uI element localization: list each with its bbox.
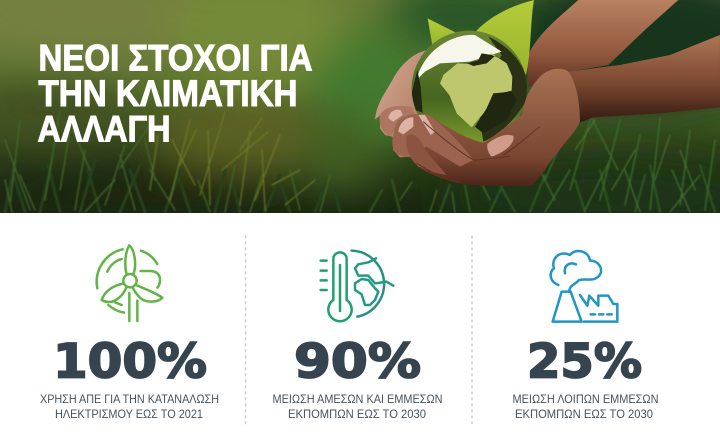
upper forearm xyxy=(527,0,678,87)
hero photo: hands holding a glass globe over grass xyxy=(0,0,720,230)
grass blades xyxy=(5,110,715,212)
thumb nail xyxy=(487,135,514,157)
panel: other indirect emissions xyxy=(512,251,658,421)
title: ΝΕΟΙ ΣΤΟΧΟΙ ΓΙΑ xyxy=(38,36,312,78)
finger nails and knuckles xyxy=(388,110,435,135)
icon: thermometer and globe xyxy=(321,251,393,321)
caption: other indirect emissions: ΕΚΠΟΜΠΩΝ ΕΩΣ ΤΟ 2030 xyxy=(515,407,653,421)
icon: factory and smoke cloud xyxy=(551,251,617,322)
leaves xyxy=(428,18,456,44)
title: ΑΛΛΑΓΗ xyxy=(38,108,170,150)
cupped front hand and palm xyxy=(420,69,580,186)
title xyxy=(38,36,312,150)
icon: wind turbine xyxy=(97,245,162,321)
panel: renewable electricity xyxy=(40,245,219,421)
divider: left xyxy=(244,236,246,424)
caption: renewable electricity: ΧΡΗΣΗ ΑΠΕ ΓΙΑ ΤΗΝ ΚΑΤΑΝΑΛΩΣΗ xyxy=(40,392,219,406)
lower forearm xyxy=(560,35,720,125)
panel: direct and indirect emissions xyxy=(272,251,442,421)
caption: other indirect emissions xyxy=(512,392,658,421)
figure: 100%: 100% xyxy=(53,334,207,390)
hands and globe xyxy=(375,0,720,186)
caption: direct and indirect emissions: ΜΕΙΩΣΗ ΑΜΕΣΩΝ ΚΑΙ ΕΜΜΕΣΩΝ xyxy=(272,392,442,406)
figure: 25%: 25% xyxy=(527,334,642,390)
fingers xyxy=(380,106,415,136)
caption: direct and indirect emissions: ΕΚΠΟΜΠΩΝ ΕΩΣ ΤΟ 2030 xyxy=(288,407,426,421)
figure: 90%: 90% xyxy=(294,334,421,390)
divider: right xyxy=(471,236,473,424)
caption: direct and indirect emissions xyxy=(272,392,442,421)
caption: other indirect emissions: ΜΕΙΩΣΗ ΛΟΙΠΩΝ ΕΜΜΕΣΩΝ xyxy=(512,392,658,406)
back hand fingers xyxy=(375,50,426,168)
caption: renewable electricity: ΗΛΕΚΤΡΙΣΜΟΥ ΕΩΣ ΤΟ 2021 xyxy=(55,407,203,421)
title: ΤΗΝ ΚΛΙΜΑΤΙΚΗ xyxy=(38,72,298,114)
glass globe xyxy=(410,30,530,143)
caption: renewable electricity xyxy=(40,392,219,421)
